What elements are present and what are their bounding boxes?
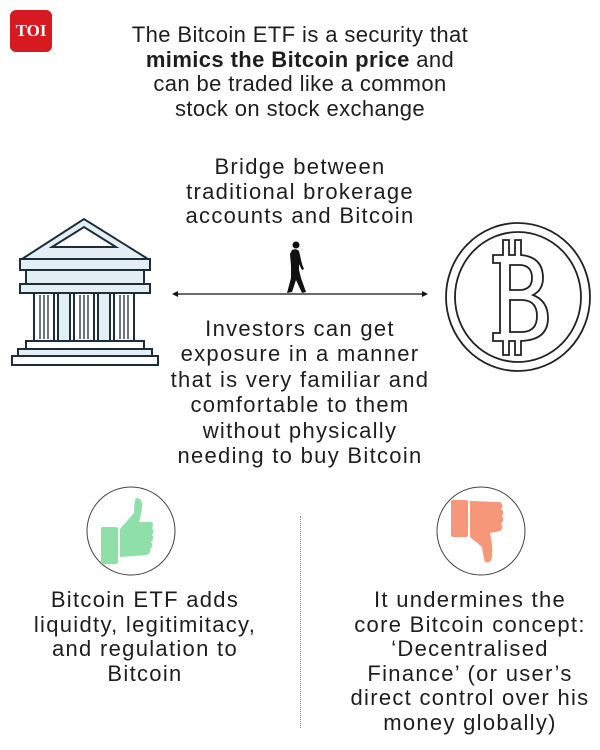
- title text: stock on stock exchange: [175, 96, 425, 120]
- title text: The Bitcoin ETF is a security that: [132, 22, 468, 47]
- investors text: Investors can get: [205, 316, 395, 341]
- logo: TOI: TOI: [16, 21, 46, 40]
- bridge text: accounts and Bitcoin: [185, 203, 415, 228]
- bridge text: [185, 154, 415, 228]
- pro text: Bitcoin: [107, 660, 183, 686]
- title text: mimics the Bitcoin price and: [146, 46, 454, 72]
- icon: thumbs down: [436, 486, 526, 576]
- pro text: liquidty, legitimitacy,: [34, 612, 256, 636]
- icon: bank building: [11, 218, 159, 366]
- icon: walking person: [287, 242, 306, 293]
- con text: direct control over his: [350, 685, 590, 710]
- pro text: [34, 587, 256, 686]
- icon: thumbs up: [86, 486, 176, 576]
- con text: money globally): [383, 710, 557, 734]
- investors text: that is very familiar and: [171, 367, 429, 392]
- icon: bitcoin coin: [445, 222, 591, 372]
- divider dashed: [300, 516, 301, 728]
- con text: It undermines the: [374, 587, 566, 612]
- pro text: and regulation to: [52, 636, 238, 661]
- investors text: needing to buy Bitcoin: [177, 443, 423, 468]
- con text: ‘Decentralised: [391, 636, 549, 661]
- logo: TOI: [10, 10, 52, 52]
- investors text: without physically: [203, 418, 397, 443]
- con text: [350, 587, 590, 734]
- investors text: comfortable to them: [190, 392, 410, 417]
- investors text: [170, 316, 429, 468]
- title text: [132, 22, 468, 120]
- pro text: Bitcoin ETF adds: [51, 587, 239, 612]
- title text: can be traded like a common: [153, 71, 447, 96]
- investors text: exposure in a manner: [181, 341, 419, 366]
- con text: core Bitcoin concept:: [354, 612, 586, 636]
- bridge text: traditional brokerage: [186, 178, 414, 204]
- arrow: bridge line: [172, 291, 428, 297]
- bridge text: Bridge between: [214, 154, 386, 179]
- con text: Finance’ (or user’s: [367, 660, 573, 686]
